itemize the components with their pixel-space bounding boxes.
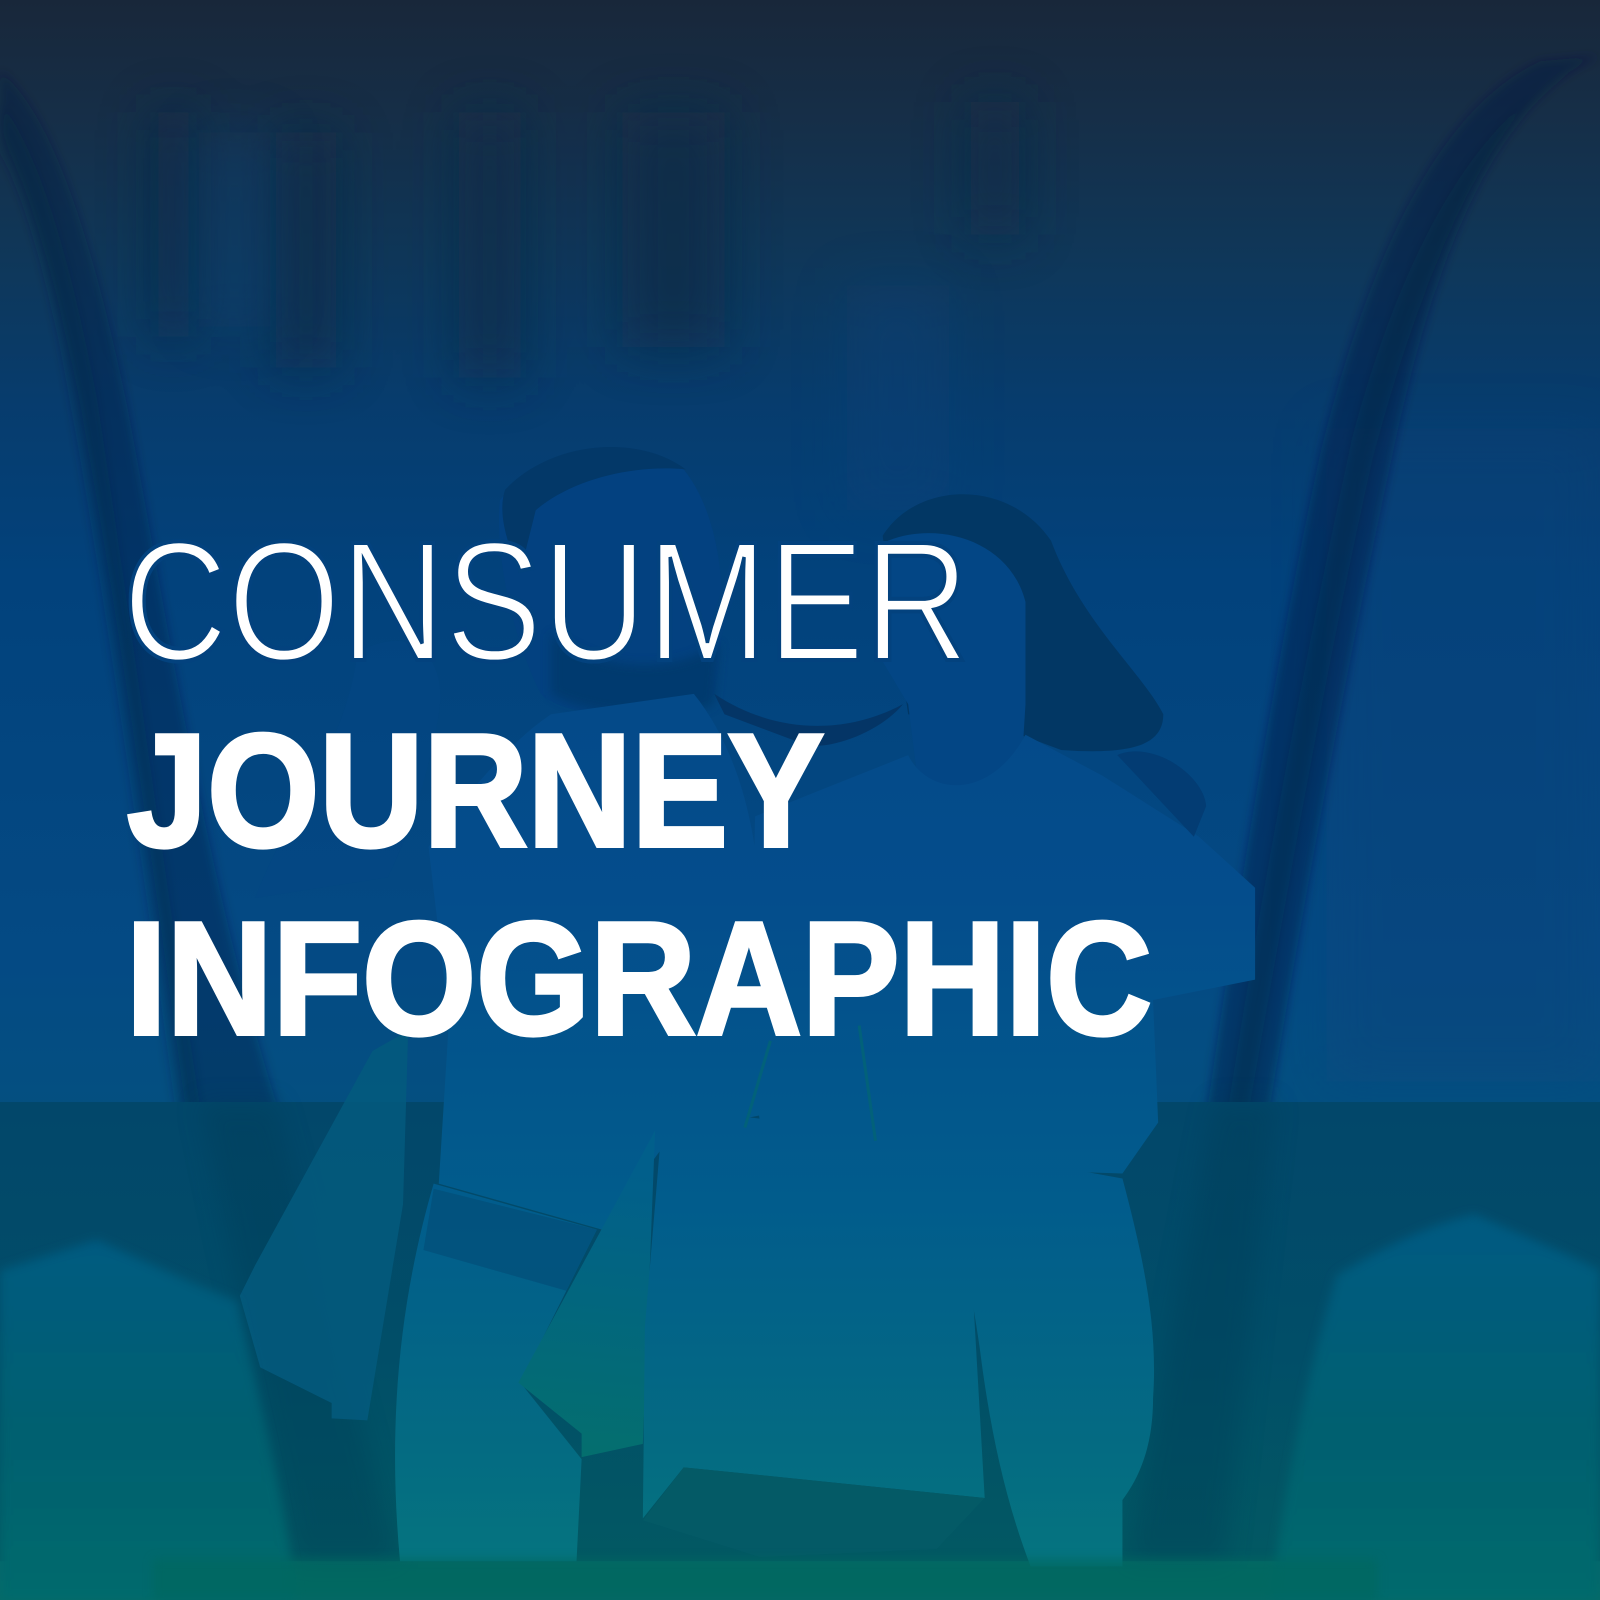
lit store panels <box>199 133 1600 1082</box>
green side panel of front bag <box>518 1131 655 1457</box>
left escalator handrail <box>0 71 286 1133</box>
store signage blur <box>153 102 1020 378</box>
man beard shade <box>551 633 719 715</box>
right foreground rail <box>1270 1214 1600 1600</box>
woman hand on shoulder <box>1117 751 1206 837</box>
left foreground rail <box>0 1240 296 1600</box>
bag handles <box>745 1026 876 1141</box>
title line: JOURNEY: JOURNEY <box>127 701 824 881</box>
front shopping bag <box>643 1026 985 1557</box>
right escalator handrail <box>1204 56 1600 1133</box>
man shirt <box>429 694 776 1230</box>
woman hair <box>883 494 1163 751</box>
woman figure <box>714 494 1255 1566</box>
man jeans <box>395 1184 597 1561</box>
title <box>123 507 1152 1069</box>
man arm <box>255 641 440 898</box>
lower dark band <box>0 1102 1600 1561</box>
man beard <box>714 694 903 746</box>
man figure <box>255 447 776 1561</box>
woman face <box>878 533 1026 786</box>
woman jeans <box>954 1148 1154 1566</box>
escalator steps <box>153 1559 1378 1600</box>
bag base <box>643 1467 985 1557</box>
left and right rail in lower band <box>199 1102 1275 1561</box>
woman shirt <box>750 735 1255 1173</box>
title line: CONSUMER: CONSUMER <box>123 507 969 697</box>
man head and hair <box>499 450 722 715</box>
title line: INFOGRAPHIC: INFOGRAPHIC <box>126 889 1152 1069</box>
left shopping bag <box>240 1031 408 1420</box>
